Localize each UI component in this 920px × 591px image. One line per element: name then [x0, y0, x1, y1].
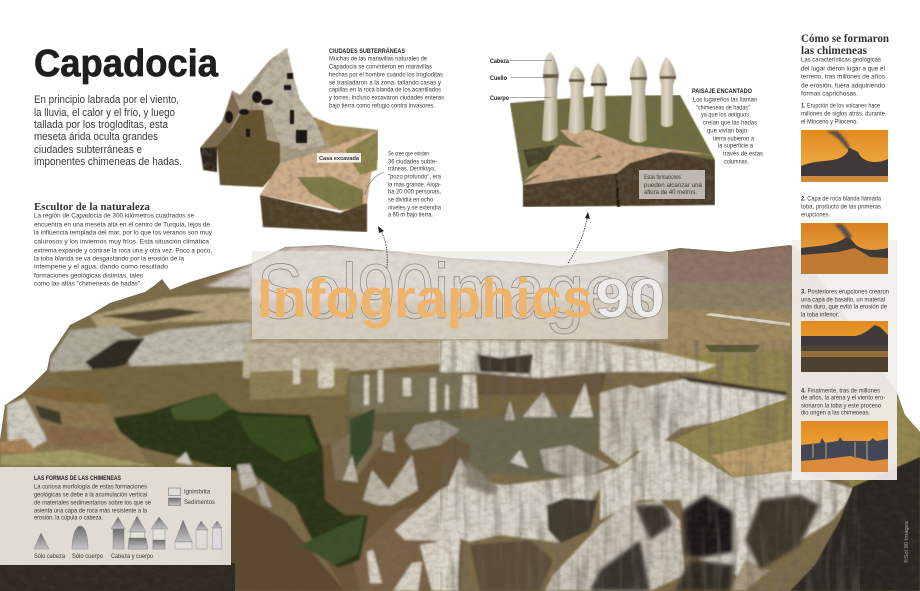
callout: height of formations: Estas formaciones — [644, 174, 681, 181]
intro of panel: terreno, tras millones de años — [801, 74, 885, 80]
panel text: erosión, la cúpula o cabeza. — [34, 514, 103, 522]
body: Escultor: la toba blanda se va desgastando por la erosión de la — [34, 256, 184, 262]
heading: Como se formaron: las chimeneas — [801, 45, 868, 57]
body: Escultor: extrema expande y contrae la roca una y otra vez. Poco a poco, — [34, 248, 212, 254]
eroded white cliffs — [440, 440, 857, 591]
landscape photograph — [0, 240, 920, 591]
dark green trees — [113, 392, 375, 568]
panel text: asienta una capa de roca más resistente a la — [34, 508, 147, 514]
text: Ciudades subterráneas: Muchas de las maravillas naturales de — [329, 56, 427, 62]
part labels: Cabeza — [490, 58, 509, 65]
cave openings — [225, 73, 307, 143]
text: Paisaje encantado: "chimeneas de hadas" — [696, 104, 750, 112]
step 4 text: dio origen a las chimeneas. — [801, 410, 870, 416]
step 4 text — [801, 388, 885, 416]
chimney columns — [542, 52, 676, 143]
title: Capadocia — [34, 43, 219, 85]
shape captions: Cabeza y cuerpo — [111, 553, 153, 560]
panel text: geológicas se debe a la acumulación vertical — [34, 492, 147, 498]
watermark band — [252, 247, 668, 339]
shape captions — [34, 553, 153, 560]
body: Escultor: calurosos y los inviernos muy fríos. Esta situación climática — [34, 238, 210, 246]
intro text: imponentes chimeneas de hadas. — [34, 156, 182, 168]
shapes diagram — [34, 516, 222, 549]
text: Ciudades subterráneas — [329, 46, 444, 110]
body: Escultor: formaciones geológicas distintas, tales — [34, 272, 143, 280]
body: Escultor: como las altas "chimeneas de hadas". — [34, 280, 142, 288]
rim cliffs upper — [440, 340, 787, 480]
text: Ciudades subterráneas: se trasladaron a la zona, tallando casas y — [329, 80, 442, 86]
brown gorge slopes — [145, 430, 470, 591]
arrow to chimney block — [568, 212, 590, 263]
rock streaks — [440, 340, 860, 591]
callout: height of formations: pueden alcanzar una — [644, 182, 702, 189]
text: Ciudades subterráneas: y torres. Incluso excavaron ciudades enteras — [329, 94, 444, 102]
body: Escultor — [34, 212, 213, 288]
text: Paisaje encantado: creían que las hadas — [703, 120, 757, 126]
step 2 text: erupciones. — [801, 212, 830, 218]
note leader line — [365, 172, 384, 195]
step 3 diagram — [801, 321, 888, 372]
legend — [168, 488, 215, 506]
fairy chimneys block illustration — [510, 52, 715, 207]
step 3 text: la toba inferior. — [801, 312, 839, 318]
dark rock bottom right — [790, 457, 920, 591]
text: Paisaje encantado: PAISAJE ENCANTADO — [692, 88, 752, 95]
panel text: LAS FORMAS DE LAS CHIMENEAS — [34, 475, 121, 482]
rock texture — [0, 240, 920, 591]
tan plateau — [673, 393, 920, 487]
part labels — [490, 58, 552, 102]
step 2 text: toba, producto de las primeras — [801, 204, 881, 210]
step 2 diagram — [801, 223, 888, 274]
text: Derinkuyu note: Se cree que existen — [388, 150, 429, 158]
label: Casa excavada — [317, 153, 361, 162]
bottom dark strata left — [0, 563, 235, 591]
intro text: la lluvia, el calor y el frío, y luego — [34, 107, 175, 119]
shape captions: Sólo cuerpo — [72, 553, 103, 560]
panel text: La curiosa morfología de estas formaciones — [34, 484, 147, 490]
callout: height of formations — [639, 170, 705, 199]
text: Paisaje encantado: que vivían bajo — [707, 128, 747, 134]
body: Escultor: intemperie y el agua, dando como resultado — [34, 264, 169, 270]
body: Escultor: La región de Capadocia de 300 kilómetros cuadrados se — [34, 212, 195, 220]
step 4 text: 4. Finalmente, tras de millones — [801, 388, 880, 394]
text: Paisaje encantado: tierra subieron a — [713, 136, 754, 142]
photo credit: ©Sol 90 Images — [903, 521, 910, 563]
text: Derinkuyu note — [388, 150, 441, 218]
heading: Escultor de la naturaleza: Escultor de la naturaleza — [34, 201, 150, 213]
step 1 text: 1. Erupción de los volcanes hace — [801, 102, 880, 110]
step 4 text: de años, la arena y el viento ero- — [801, 394, 885, 402]
label: Casa excavada: Casa excavada — [319, 156, 360, 162]
text: Derinkuyu note: se dividía en ocho — [388, 196, 433, 204]
intro text: En principio labrada por el viento, — [34, 94, 179, 106]
cliff shadows — [465, 460, 820, 591]
text: Derinkuyu note: 36 ciudades subte- — [388, 158, 437, 166]
intro text: meseta árida oculta grandes — [34, 131, 158, 143]
arrow to cave block — [378, 226, 387, 268]
fairy chimneys on the rim — [293, 358, 449, 412]
text: Derinkuyu note: a 60 m bajo tierra. — [388, 212, 433, 218]
panel text — [34, 475, 151, 522]
left ledge — [0, 386, 155, 466]
panel: Como se formaron — [792, 33, 897, 480]
watermark number: 90 — [595, 267, 665, 329]
step 3 text: 3. Posteriores erupciones crearon — [801, 288, 889, 296]
intro of panel: Las características geológicas — [801, 56, 881, 64]
step 4 diagram — [801, 421, 888, 472]
legend: Ignimbrita — [184, 488, 210, 496]
intro text: tallada por los trogloditas, esta — [34, 119, 169, 131]
step 1 text: millones de siglos atrás, durante — [801, 110, 885, 118]
callout: height of formations: altura de 40 metros. — [644, 189, 697, 196]
text: Derinkuyu note: rráneas. Derinkuyu, — [388, 166, 436, 172]
panel text: de materiales sedimentarios sobre los que se — [34, 500, 151, 506]
text: Ciudades subterráneas: capillas en la roca blanda de los acantilados — [329, 86, 441, 94]
distant mountains and plain — [180, 245, 800, 400]
part labels: Cuerpo — [490, 95, 509, 102]
panel: Las formas de las chimeneas — [0, 467, 231, 565]
text: Derinkuyu note: ba 20 000 personas, — [388, 188, 441, 196]
text: Derinkuyu note: niveles y se extendía — [388, 204, 441, 212]
step 3 text — [801, 288, 889, 318]
watermark outline: Sol90images — [257, 247, 657, 335]
intro of panel: formas caprichosas. — [801, 90, 858, 98]
step 3 text: más duro, que evitó la erosión de — [801, 304, 887, 310]
valley cones left — [175, 420, 462, 591]
terrain layers — [0, 285, 857, 591]
near plain details — [705, 313, 790, 326]
text: Derinkuyu note: la más grande. Aloja- — [388, 182, 441, 188]
text: Ciudades subterráneas: CIUDADES SUBTERRÁNEAS — [329, 46, 405, 55]
text: Paisaje encantado — [692, 88, 763, 166]
text: Ciudades subterráneas: bajo tierra como refugio contra invasores. — [329, 102, 435, 110]
intro text — [34, 94, 182, 168]
body: Escultor: encuentra en una meseta alta en el centro de Turquía, lejos de — [34, 222, 211, 228]
watermark orange: Infographics — [257, 267, 593, 329]
intro of panel — [801, 56, 886, 98]
step 1 text: el Mioceno y Plioceno. — [801, 118, 858, 126]
text: Paisaje encantado: ya que los antiguos — [701, 112, 749, 118]
text: Derinkuyu note: "pozo profundo", era — [388, 174, 441, 180]
left mesa — [48, 284, 252, 374]
text: Ciudades subterráneas: Capadocia se convirtieron en maravillas — [329, 64, 432, 70]
text: Paisaje encantado: través de estas — [723, 150, 763, 158]
shape captions: Sólo cabeza — [34, 553, 65, 560]
centre valley — [47, 342, 620, 480]
step 4 text: sionaron la toba y este proceso — [801, 402, 881, 410]
body: Escultor: la influencia templada del mar, por lo que los veranos son muy — [34, 230, 213, 236]
step 2 text: 2. Capa de roca blanda llamada — [801, 196, 881, 202]
legend: Sedimentos — [184, 499, 215, 506]
step 3 text: una capa de basalto, un material — [801, 296, 885, 304]
intro text: ciudades subterráneas e — [34, 144, 142, 156]
heading: Como se formaron — [801, 33, 890, 57]
text: Paisaje encantado: Los lugareños las llaman — [693, 96, 757, 104]
step 1 diagram — [801, 130, 888, 182]
intro of panel: del lugar dieron lugar a que el — [801, 66, 885, 72]
cave house block illustration — [200, 48, 378, 232]
step 1 text — [801, 102, 885, 126]
text: Paisaje encantado: columnas. — [724, 158, 749, 166]
text: Paisaje encantado: la superficie a — [718, 142, 753, 150]
text: Ciudades subterráneas: hechas por el hombre cuando los trogloditas — [329, 72, 443, 78]
heading: Como se formaron: Cómo se formaron — [801, 33, 890, 45]
intro of panel: de erosión, fuera adquiriendo — [801, 82, 886, 90]
step 2 text — [801, 196, 881, 218]
part labels: Cuello — [490, 75, 507, 82]
